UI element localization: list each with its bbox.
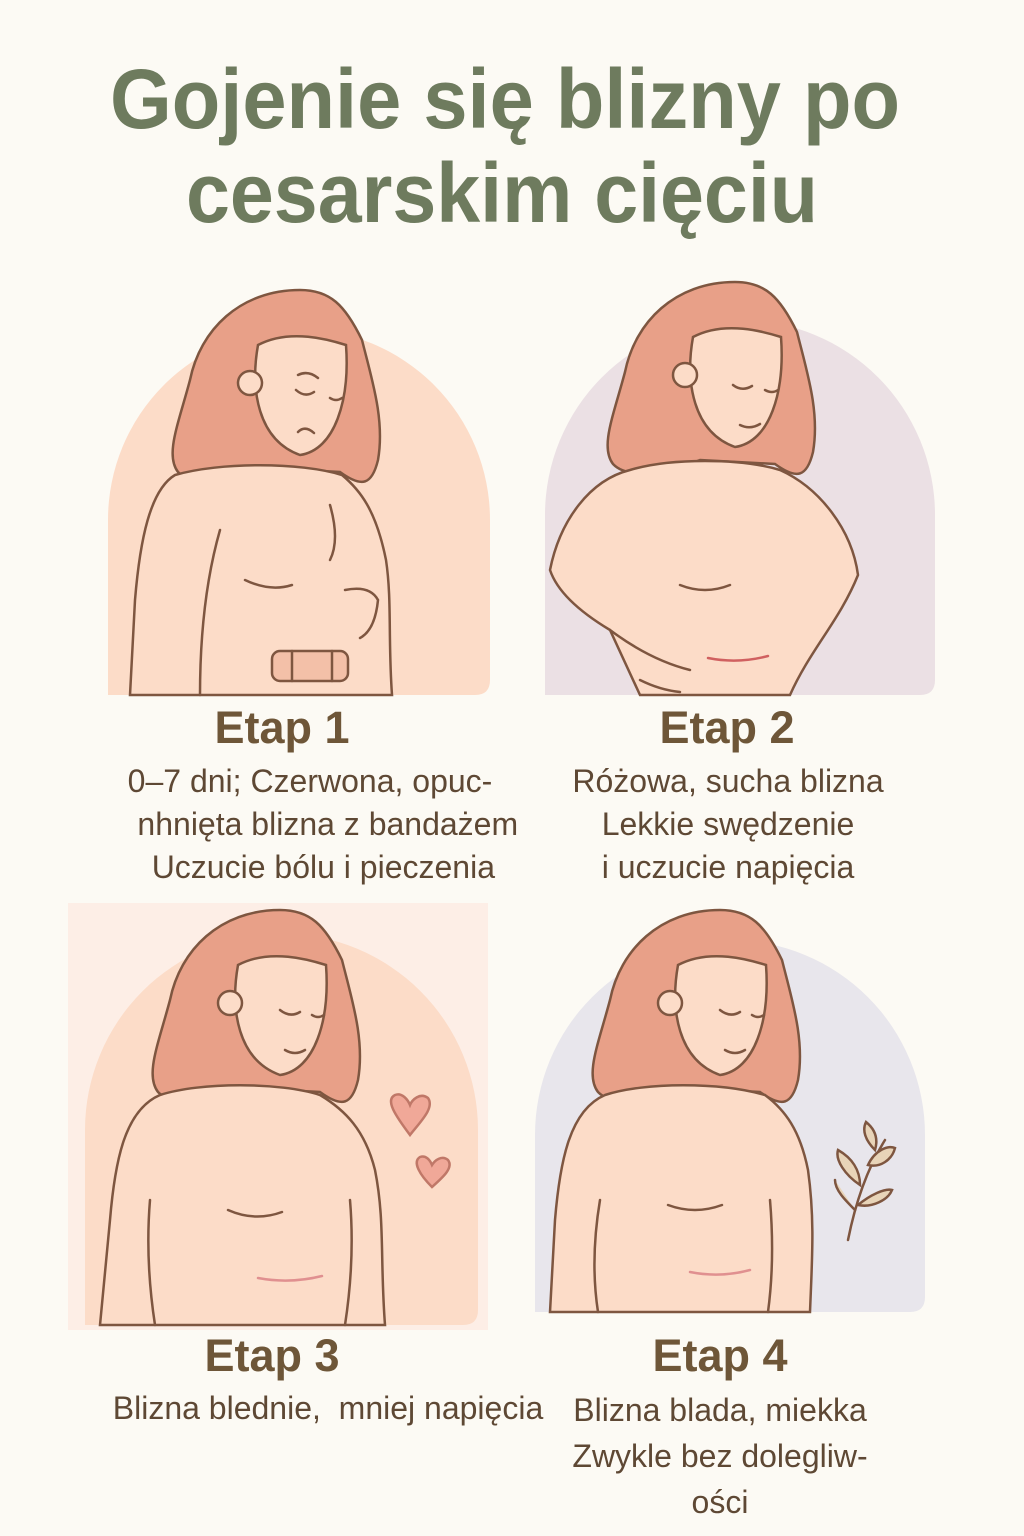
stage 4 text — [572, 1392, 868, 1520]
title — [110, 52, 900, 240]
stage 3 text: Blizna blednie, mniej napięcia — [113, 1390, 543, 1426]
panel 1 illustration — [108, 290, 490, 695]
stage 2 text — [572, 763, 884, 885]
stage 4 text: Zwykle bez dolegliw- — [572, 1438, 868, 1474]
stage 2 heading: Etap 2 — [659, 702, 795, 753]
title: cesarskim cięciu — [186, 146, 818, 240]
stage 1 text: 0–7 dni; Czerwona, opuc- — [128, 763, 492, 799]
stage 2 text: Różowa, sucha blizna — [572, 763, 884, 799]
stage 4 heading: Etap 4 — [652, 1330, 788, 1381]
stage 1 text: nhnięta blizna z bandażem — [137, 806, 518, 842]
panel 2 illustration — [545, 282, 935, 695]
panel 3 illustration — [68, 903, 488, 1330]
stage 1 text: Uczucie bólu i pieczenia — [152, 849, 495, 885]
stage 3 heading: Etap 3 — [204, 1330, 340, 1381]
stage 2 text: i uczucie napięcia — [602, 849, 854, 885]
stage 1 text — [128, 763, 518, 885]
title: Gojenie się blizny po — [110, 52, 900, 146]
stage 1 heading: Etap 1 — [214, 702, 350, 753]
panel 4 illustration — [535, 910, 925, 1312]
stage 4 text: Blizna blada, miekka — [573, 1392, 867, 1428]
stage 2 text: Lekkie swędzenie — [602, 806, 854, 842]
stage 4 text: ości — [692, 1484, 748, 1520]
